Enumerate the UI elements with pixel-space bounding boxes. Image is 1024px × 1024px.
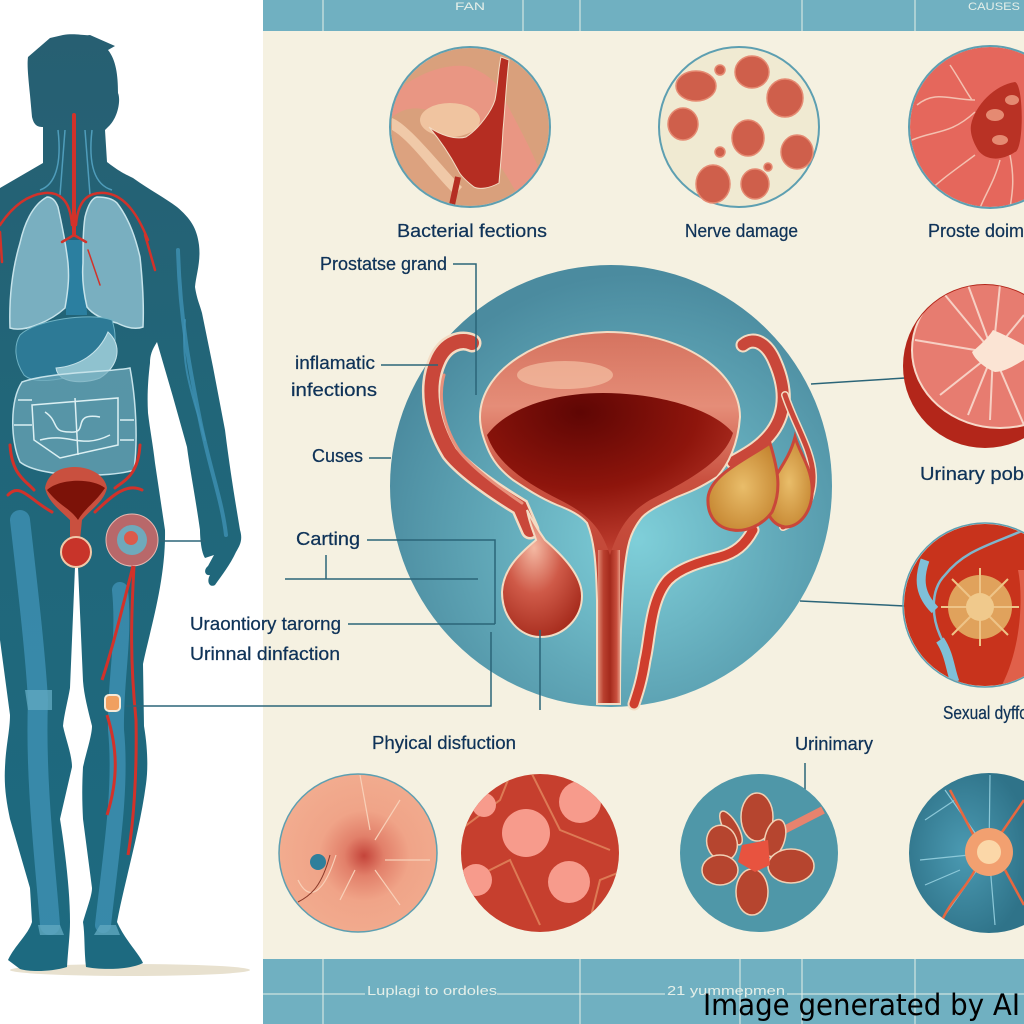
body silhouette <box>0 34 241 971</box>
label: carting: Carting <box>296 528 360 549</box>
figure ground shadow <box>10 964 250 976</box>
left ureter tube <box>431 341 530 530</box>
top banner strip <box>263 0 1024 31</box>
thumbnail: sexual dysfunction <box>900 520 1024 690</box>
thumbnail: physical dysfunction skin <box>275 770 440 935</box>
label: urinary group <box>190 613 341 664</box>
thumbnail: nerve damage <box>659 47 819 207</box>
thumbnail: red tissue cells <box>461 774 619 932</box>
thumbnail: urinary problems <box>903 272 1024 448</box>
band highlight <box>517 361 613 389</box>
bladder inner cavity <box>487 393 733 555</box>
stem shading <box>598 550 620 703</box>
bladder outer body with stem <box>480 332 740 704</box>
label: urinary group: Urinnal dinfaction <box>190 643 340 664</box>
bottom banner left text: Luplagi to ordoles <box>367 983 498 998</box>
golden glands <box>708 437 812 530</box>
label: urinary problems: Urinary pob <box>920 463 1024 484</box>
lungs <box>10 197 143 329</box>
teal background circle <box>390 265 832 707</box>
bottom banner middle text: 21 yummepmen <box>667 983 785 998</box>
arm and leg blue muscle strips <box>20 250 226 925</box>
label: inflammatic infections: infections <box>291 379 377 400</box>
bottom banner strip <box>263 959 1024 1024</box>
label: prostate gland: Prostatse grand <box>320 253 447 274</box>
thumbnail: urinary petals <box>680 774 838 932</box>
label: bacterial infections: Bacterial fections <box>397 220 547 241</box>
label: physical dysfunction: Phyical disfuction <box>372 732 516 753</box>
thumbnail: blue nerve cell <box>905 770 1024 935</box>
leg arteries <box>102 566 136 855</box>
central bladder diagram <box>390 265 832 707</box>
label: causes: Cuses <box>312 445 363 466</box>
leader lines <box>126 264 905 795</box>
thumbnail: bacterial infections <box>385 47 550 210</box>
small knee marker <box>105 695 120 711</box>
label: inflammatic infections: inflamatic <box>295 352 375 373</box>
banner text right: CAUSES <box>968 1 1020 13</box>
neck nerves <box>40 130 112 195</box>
label: urinary: Urinimary <box>795 733 874 754</box>
knee and ankle highlights <box>25 690 120 935</box>
label: inflammatic infections <box>291 352 377 400</box>
label: urinary group: Uraontiory tarorng <box>190 613 341 634</box>
intestines <box>13 368 136 475</box>
label: prostate domain: Proste doim <box>928 220 1024 241</box>
cream content panel <box>263 0 1024 1024</box>
prostate droplet <box>502 510 582 637</box>
pink detail circle on thigh <box>106 514 158 566</box>
human body figure <box>0 34 241 971</box>
small bladder <box>45 467 107 567</box>
banner text left: FAN <box>455 1 485 13</box>
chest vessel <box>66 240 87 315</box>
spine and arteries <box>0 115 155 512</box>
label: nerve damage: Nerve damage <box>685 220 798 241</box>
right ureter tube with lower duct <box>634 341 813 704</box>
abdomen organs: liver and stomach <box>16 317 117 382</box>
thumbnail: prostate domain <box>905 45 1024 210</box>
